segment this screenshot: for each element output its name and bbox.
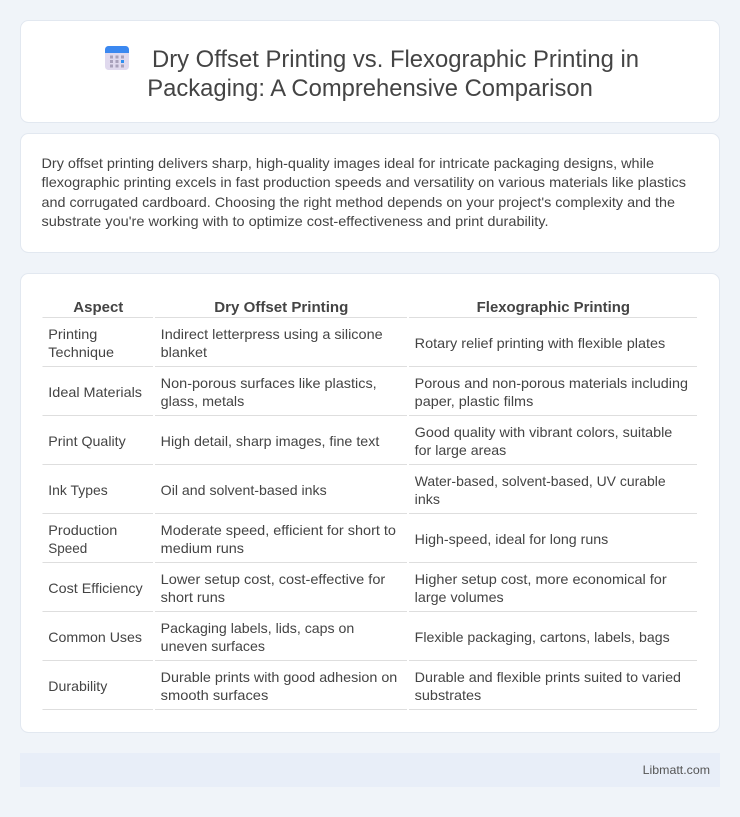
footer bar: Libmatt.com bbox=[643, 763, 710, 777]
row: cost efficiency: Higher setup cost, more economical for bbox=[415, 571, 667, 587]
row: printing technique: Printing bbox=[48, 326, 97, 342]
text block: introduction: flexographic printing excels in fast production speeds and versatility on various materials like plastics bbox=[42, 174, 686, 190]
row: printing technique: Rotary relief printing with flexible plates bbox=[415, 335, 665, 351]
row: printing technique: Technique bbox=[48, 344, 114, 360]
row: durability bbox=[42, 669, 697, 710]
row: print quality: High detail, sharp images, fine text bbox=[161, 433, 379, 449]
row: production speed: High-speed, ideal for long runs bbox=[415, 531, 608, 547]
row: common uses: Flexible packaging, cartons, labels, bags bbox=[415, 629, 670, 645]
table header: Dry Offset Printing bbox=[214, 300, 348, 316]
title: Packaging: A Comprehensive Comparison bbox=[147, 75, 593, 102]
table header bbox=[42, 300, 697, 318]
row: printing technique bbox=[42, 326, 697, 367]
row: common uses: uneven surfaces bbox=[161, 638, 265, 654]
text block: introduction: substrate you're working with to optimize cost-effectiveness and print durability. bbox=[42, 213, 548, 229]
row: ideal materials bbox=[42, 375, 697, 416]
footer bar bbox=[20, 753, 720, 787]
row: durability: Durable prints with good adhesion on bbox=[161, 669, 397, 685]
row: ink types: Oil and solvent-based inks bbox=[161, 482, 327, 498]
row: cost efficiency: Lower setup cost, cost-effective for bbox=[161, 571, 386, 587]
row: durability: Durable and flexible prints suited to varied bbox=[415, 669, 681, 685]
table header: Aspect bbox=[73, 300, 123, 316]
row: printing technique: Indirect letterpress using a silicone bbox=[161, 326, 383, 342]
row: ideal materials: Ideal Materials bbox=[48, 384, 142, 400]
row: ideal materials: Non-porous surfaces like plastics, bbox=[161, 375, 377, 391]
row: production speed bbox=[42, 522, 697, 563]
table header: Flexographic Printing bbox=[477, 300, 630, 316]
text block: introduction: and corrugated cardboard. Choosing the right method depends on your project's complexity and the bbox=[42, 194, 675, 210]
icon: calendar bbox=[105, 46, 129, 70]
row: ink types: Water-based, solvent-based, UV curable bbox=[415, 473, 666, 489]
row: production speed: Speed bbox=[48, 540, 87, 556]
row: durability: substrates bbox=[415, 687, 481, 703]
row: ideal materials: glass, metals bbox=[161, 393, 244, 409]
row: cost efficiency bbox=[42, 571, 697, 612]
row: durability: Durability bbox=[48, 678, 107, 694]
row: production speed: Production bbox=[48, 522, 117, 538]
row: print quality bbox=[42, 424, 697, 465]
row: printing technique: blanket bbox=[161, 344, 207, 360]
title: Dry Offset Printing vs. Flexographic Printing in bbox=[152, 46, 639, 73]
text block: introduction: Dry offset printing delivers sharp, high-quality images ideal for intricate packaging designs, while bbox=[42, 155, 654, 171]
row: production speed: Moderate speed, efficient for short to bbox=[161, 522, 396, 538]
row: cost efficiency: large volumes bbox=[415, 589, 504, 605]
row: durability: smooth surfaces bbox=[161, 687, 268, 703]
panel: introduction bbox=[20, 134, 720, 252]
panel: title card bbox=[20, 20, 720, 122]
row: ideal materials: Porous and non-porous materials including bbox=[415, 375, 688, 391]
text block: introduction bbox=[42, 155, 686, 229]
row: ink types: inks bbox=[415, 491, 440, 507]
row: print quality: for large areas bbox=[415, 442, 506, 458]
row: common uses bbox=[42, 620, 697, 661]
row: print quality: Print Quality bbox=[48, 433, 126, 449]
row: print quality: Good quality with vibrant colors, suitable bbox=[415, 424, 673, 440]
row: production speed: medium runs bbox=[161, 540, 244, 556]
row: ideal materials: paper, plastic films bbox=[415, 393, 533, 409]
row: ink types: Ink Types bbox=[48, 482, 108, 498]
title bbox=[147, 46, 639, 102]
row: common uses: Packaging labels, lids, caps on bbox=[161, 620, 354, 636]
row: common uses: Common Uses bbox=[48, 629, 142, 645]
row: ink types bbox=[42, 473, 697, 514]
row: cost efficiency: Cost Efficiency bbox=[48, 580, 143, 596]
panel: comparison table bbox=[20, 274, 720, 732]
row: cost efficiency: short runs bbox=[161, 589, 225, 605]
